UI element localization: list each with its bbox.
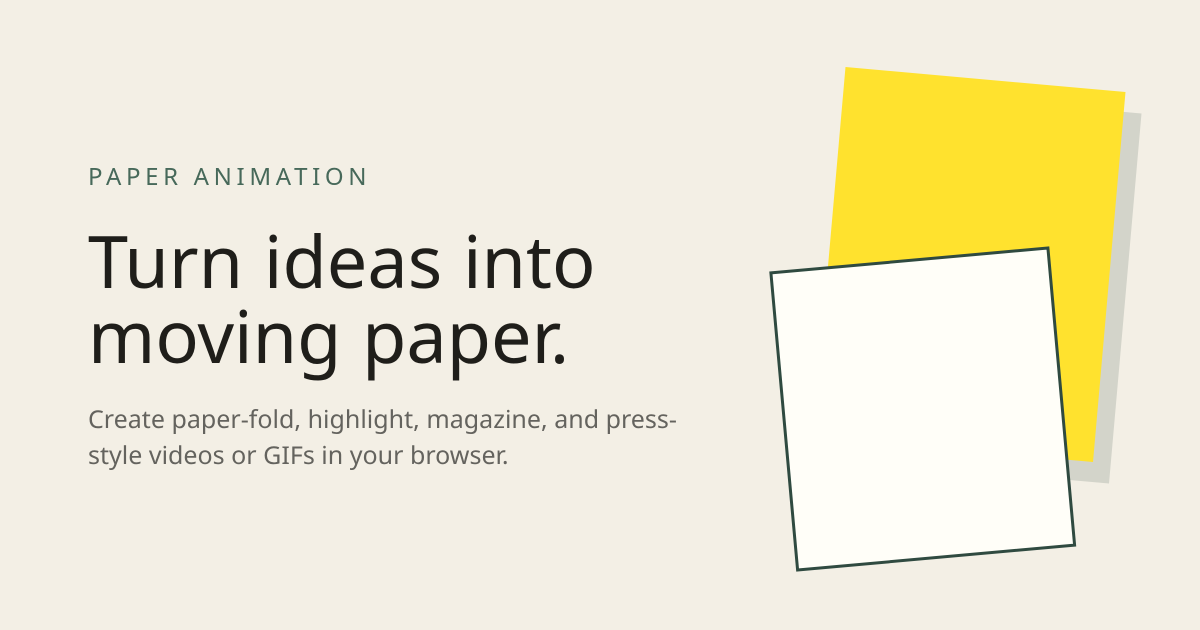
shadow sheet [829, 88, 1142, 484]
title [88, 212, 596, 385]
description text: Create paper-fold, highlight, magazine, and press- [88, 402, 677, 436]
title: Turn ideas into [88, 212, 596, 310]
description text [88, 402, 677, 472]
description text: style videos or GIFs in your browser. [88, 438, 509, 472]
title: moving paper. [88, 287, 569, 385]
kicker label: PAPER ANIMATION [88, 160, 371, 193]
yellow sheet [813, 67, 1126, 462]
white sheet [771, 248, 1075, 570]
